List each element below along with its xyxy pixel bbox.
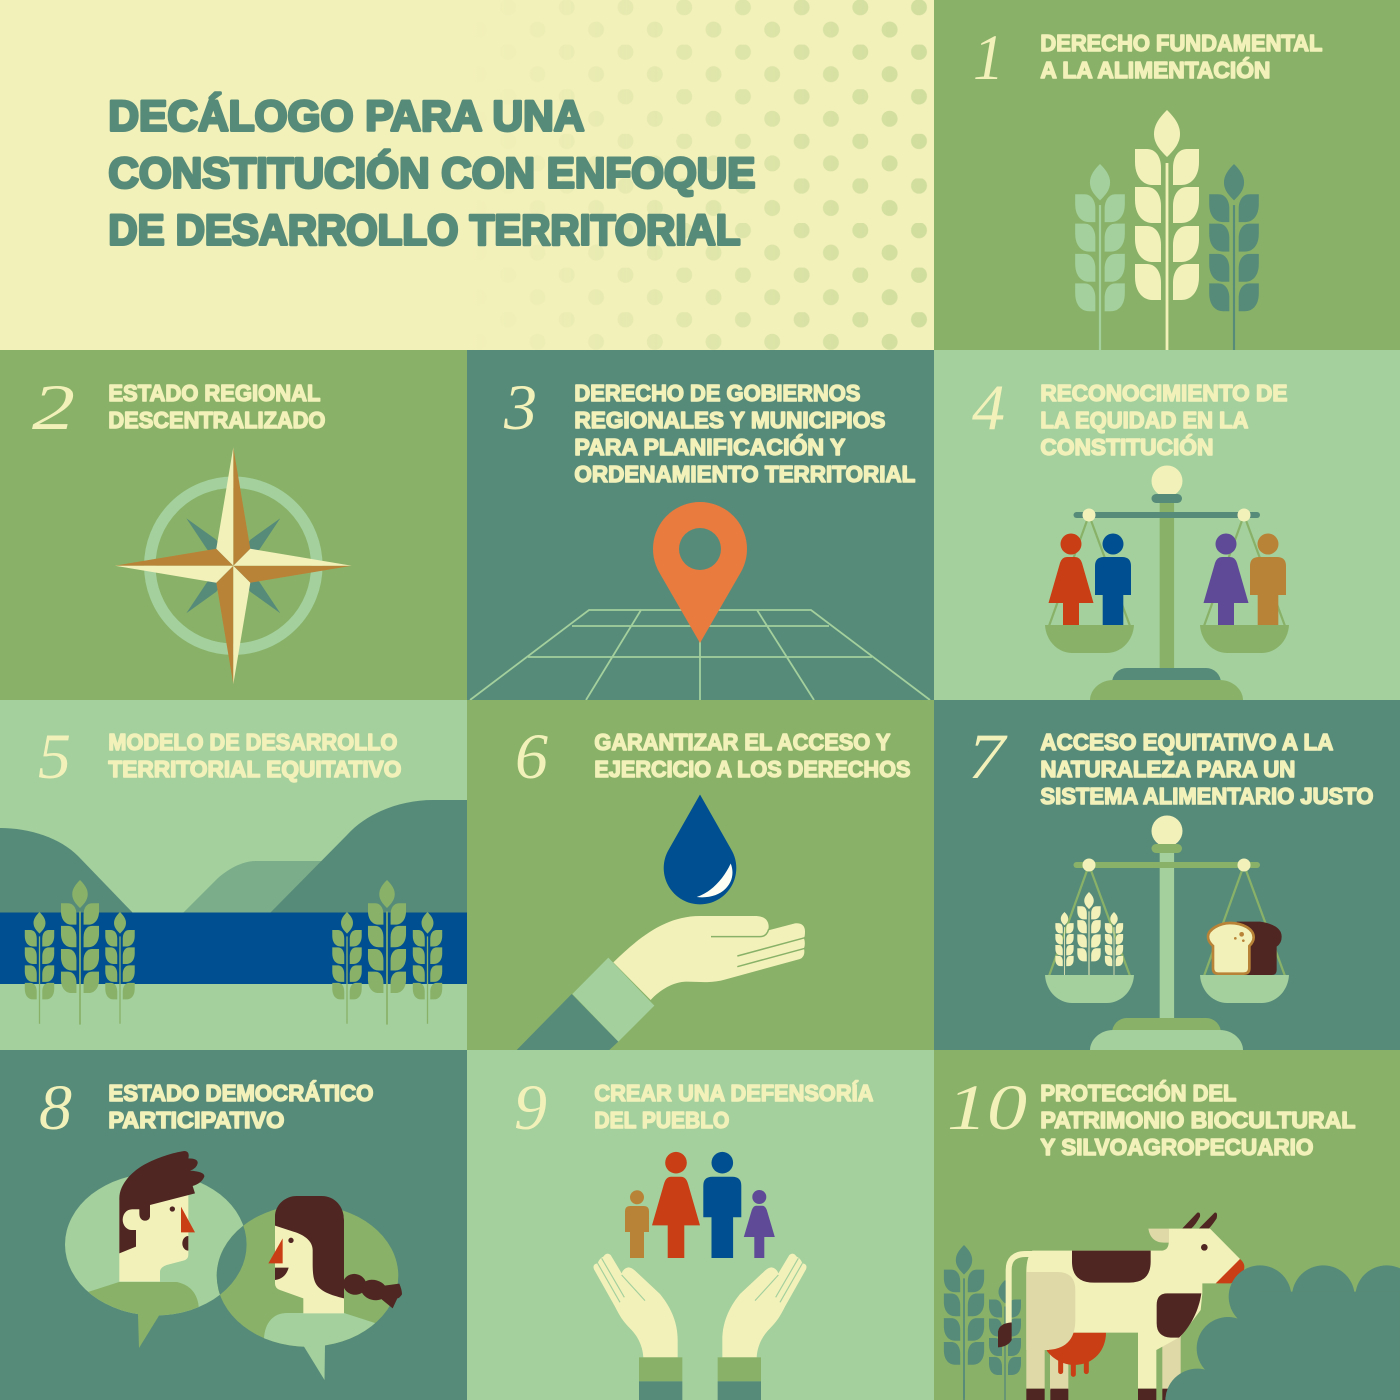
heading 7: SISTEMA ALIMENTARIO JUSTO [1040, 783, 1373, 809]
number 4: 4 [972, 372, 1005, 444]
heading 4: LA EQUIDAD EN LA [1040, 407, 1249, 433]
panel: 6 garantizar el acceso [467, 700, 934, 1050]
icon: bushes [1165, 1265, 1400, 1400]
heading 10: PROTECCIÓN DEL [1040, 1079, 1236, 1106]
heading 1: DERECHO FUNDAMENTAL [1040, 30, 1322, 56]
icon: crop rows [25, 880, 442, 1025]
heading 9: DEL PUEBLO [594, 1107, 729, 1133]
icon: bread loaf [1208, 922, 1282, 975]
number 1: 1 [973, 22, 1004, 94]
number 9: 9 [514, 1072, 547, 1144]
heading 9: CREAR UNA DEFENSORÍA [594, 1079, 874, 1106]
heading 4: RECONOCIMIENTO DE [1040, 380, 1287, 406]
number 6: 6 [515, 721, 549, 793]
icon: speech bubble left with man [60, 1174, 247, 1348]
icon: water drop [664, 794, 736, 904]
title [108, 93, 755, 255]
panel: 1 derecho a la alimentación [934, 0, 1400, 353]
icon: speech bubble right with woman [217, 1205, 398, 1380]
heading 10: PATRIMONIO BIOCULTURAL [1040, 1107, 1355, 1133]
figure: man face [119, 1151, 204, 1282]
icon: three wheat stalks [1075, 110, 1259, 353]
panel: title [108, 0, 928, 350]
icon: wheat beside cow [944, 1245, 1021, 1400]
figure: woman face [268, 1196, 402, 1313]
heading 6: GARANTIZAR EL ACCESO Y [594, 729, 891, 755]
heading 1: A LA ALIMENTACIÓN [1040, 56, 1270, 83]
icon: cow [998, 1212, 1244, 1400]
heading 6: EJERCICIO A LOS DERECHOS [594, 756, 910, 782]
heading 4: CONSTITUCIÓN [1040, 433, 1213, 460]
title: DECÁLOGO PARA UNA [108, 93, 584, 141]
number 8: 8 [39, 1072, 72, 1144]
icon: compass rose [115, 447, 352, 684]
icon: cupped hands [593, 1254, 807, 1400]
map grid [470, 610, 930, 700]
heading 8: PARTICIPATIVO [108, 1107, 284, 1133]
icon: balance scale with wheat and bread [1045, 816, 1289, 1050]
title: CONSTITUCIÓN CON ENFOQUE [108, 149, 755, 198]
number 2: 2 [32, 372, 75, 444]
icon: map pin [653, 502, 747, 643]
heading 7: ACCESO EQUITATIVO A LA [1040, 729, 1334, 755]
heading 3: DERECHO DE GOBIERNOS [574, 380, 860, 406]
heading 7: NATURALEZA PARA UN [1040, 756, 1295, 782]
landscape: hills and river [0, 800, 467, 984]
heading 2: ESTADO REGIONAL [108, 380, 320, 406]
number 7: 7 [968, 721, 1008, 793]
heading 3: REGIONALES Y MUNICIPIOS [574, 407, 885, 433]
panel: 4 reconocimiento de la equidad [934, 350, 1400, 700]
panel: 8 estado democrático participativo [0, 1050, 467, 1400]
heading 3: PARA PLANIFICACIÓN Y [574, 433, 846, 460]
heading 2: DESCENTRALIZADO [108, 407, 325, 433]
heading 5: TERRITORIAL EQUITATIVO [108, 756, 401, 782]
number 10: 10 [947, 1072, 1027, 1144]
heading 8: ESTADO DEMOCRÁTICO [108, 1079, 373, 1106]
panel: 3 derecho de gobiernos regionales [467, 350, 934, 700]
panel: 7 acceso equitativo a la naturaleza [934, 700, 1400, 1050]
icon: open hand [517, 916, 805, 1050]
icon: family [625, 1152, 775, 1258]
panel: 5 modelo de desarrollo [0, 700, 467, 1050]
heading 10: Y SILVOAGROPECUARIO [1040, 1134, 1313, 1160]
number 5: 5 [38, 721, 71, 793]
icon: balance scale with people [1045, 466, 1289, 700]
heading 5: MODELO DE DESARROLLO [108, 729, 397, 755]
heading 3: ORDENAMIENTO TERRITORIAL [574, 461, 915, 487]
panel: 9 crear una defensoría [467, 1050, 934, 1400]
number 3: 3 [503, 372, 537, 444]
title: DE DESARROLLO TERRITORIAL [108, 207, 740, 255]
panel: 10 protección del patrimonio [934, 1050, 1400, 1400]
panel: 2 estado regional [0, 350, 467, 700]
